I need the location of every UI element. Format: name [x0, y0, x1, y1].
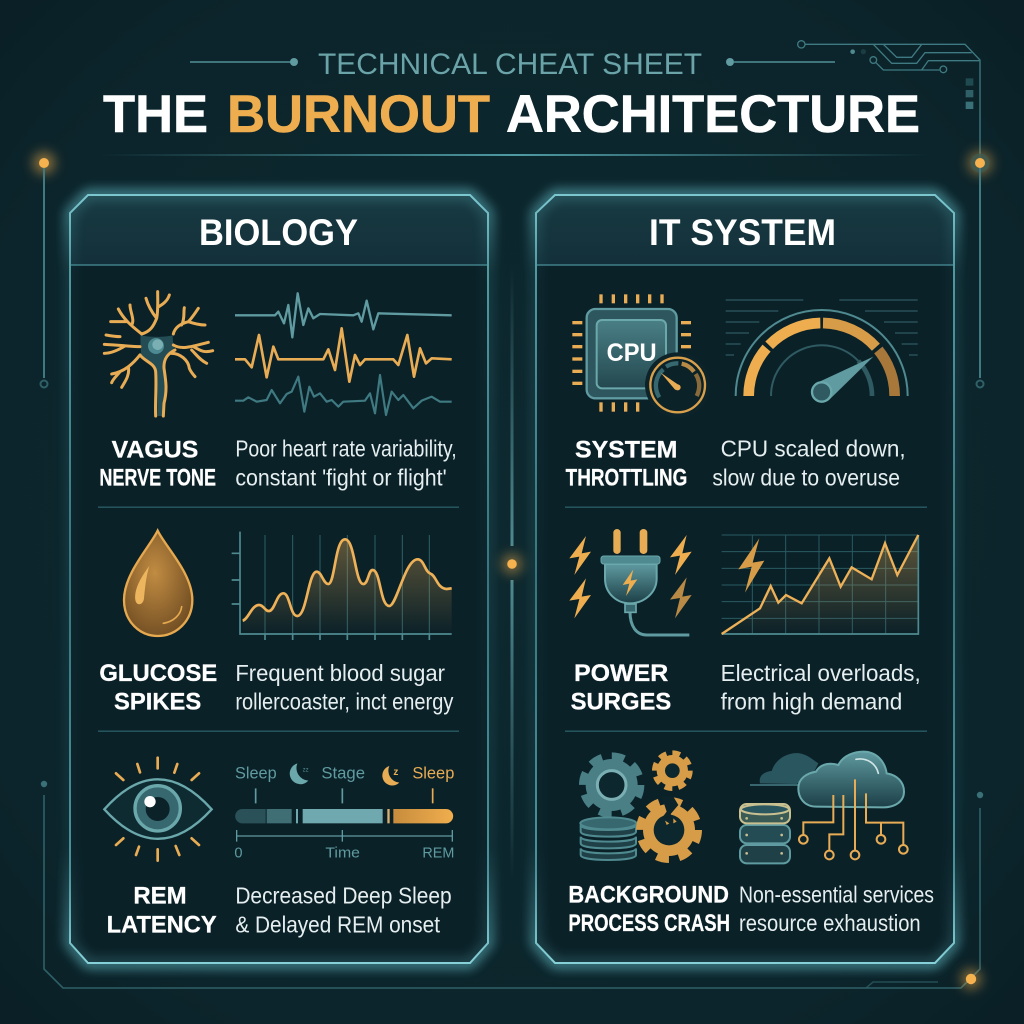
- circuit: left upper node: [33, 152, 55, 388]
- chart: sleep timeline: Stage: [321, 764, 365, 782]
- description: Electrical overloads,: [721, 660, 921, 686]
- main title: [103, 85, 920, 144]
- description: Frequent blood sugar: [235, 660, 445, 686]
- icon: cpu with gauge: [572, 294, 710, 418]
- main title: ARCHITECTURE: [506, 85, 920, 144]
- title block: [100, 48, 930, 156]
- description: [712, 436, 906, 490]
- panel: it system: [536, 195, 954, 963]
- main title: THE: [103, 85, 208, 144]
- chart: sleep timeline: Time: [325, 845, 360, 861]
- label: [107, 883, 217, 938]
- row: rem latency: [104, 758, 454, 938]
- description: from high demand: [721, 688, 902, 714]
- label: GLUCOSE: [99, 660, 217, 687]
- circuit: bottom frame trace: [41, 781, 983, 989]
- chart: orange ECG trace: [235, 328, 452, 382]
- label: PROCESS CRASH: [568, 910, 730, 937]
- label: POWER: [574, 660, 669, 687]
- icon: neuron: [104, 292, 213, 416]
- label: [566, 437, 687, 491]
- label: NERVE TONE: [99, 464, 216, 491]
- chart: teal ECG trace: [235, 293, 452, 337]
- label: [568, 882, 730, 937]
- icon: cloud and database: [740, 752, 908, 863]
- label: REM: [133, 883, 187, 910]
- description: resource exhaustion: [739, 910, 921, 936]
- chart: sleep timeline: z: [393, 767, 398, 778]
- chart: sleep timeline: [234, 763, 454, 861]
- main title: BURNOUT: [227, 85, 490, 144]
- description: [235, 883, 452, 937]
- row: background process crash: [568, 752, 934, 937]
- icon: gears and disks: [580, 753, 698, 860]
- chart: sleep timeline: Sleep: [412, 764, 454, 782]
- chart: speedometer gauge: [726, 300, 918, 402]
- description: [235, 436, 457, 490]
- label: [99, 437, 216, 491]
- chart: sleep timeline: 0: [234, 845, 242, 861]
- chart: dim ECG trace: [235, 375, 452, 415]
- row: system throttling: [566, 294, 918, 491]
- heading: biology: BIOLOGY: [199, 212, 358, 253]
- icon: glucose drop: [124, 531, 192, 636]
- icon: eye: [104, 758, 212, 861]
- chart: sleep timeline: Sleep: [235, 764, 277, 782]
- circuit: center line with node: [502, 267, 522, 879]
- label: LATENCY: [107, 911, 217, 938]
- subtitle: [190, 48, 835, 81]
- panel: biology: [70, 195, 488, 963]
- subtitle: TECHNICAL CHEAT SHEET: [318, 48, 702, 81]
- circuit: right upper node: [968, 151, 992, 388]
- description: slow due to overuse: [712, 464, 900, 490]
- row: power surges: [569, 529, 921, 715]
- chart: sleep timeline: REM: [422, 845, 454, 861]
- chart: surge line: [722, 535, 918, 634]
- label: SURGES: [571, 688, 671, 715]
- description: constant 'fight or flight': [235, 464, 447, 490]
- circuit: top right traces: [798, 41, 980, 163]
- description: [721, 660, 921, 714]
- chart: sleep timeline: zz: [303, 768, 309, 774]
- icon: cpu with gauge: CPU: [607, 340, 657, 367]
- icon: plug with bolts: [569, 529, 692, 635]
- row: vagus nerve tone: [99, 292, 457, 491]
- description: & Delayed REM onset: [235, 911, 440, 937]
- description: Poor heart rate variability,: [235, 436, 457, 462]
- row: glucose spikes: [99, 531, 454, 715]
- description: Decreased Deep Sleep: [235, 883, 452, 909]
- heading: it system: IT SYSTEM: [649, 212, 836, 253]
- description: CPU scaled down,: [721, 436, 906, 462]
- label: THROTTLING: [566, 464, 687, 491]
- label: [571, 660, 671, 715]
- description: [739, 882, 934, 936]
- chart: glucose curve: [232, 532, 452, 640]
- description: [235, 660, 454, 714]
- label: [99, 660, 217, 715]
- description: Non-essential services: [739, 882, 934, 908]
- description: rollercoaster, inct energy: [235, 688, 454, 714]
- label: BACKGROUND: [568, 882, 729, 909]
- label: VAGUS: [112, 437, 198, 464]
- label: SPIKES: [114, 688, 201, 715]
- label: SYSTEM: [575, 437, 677, 464]
